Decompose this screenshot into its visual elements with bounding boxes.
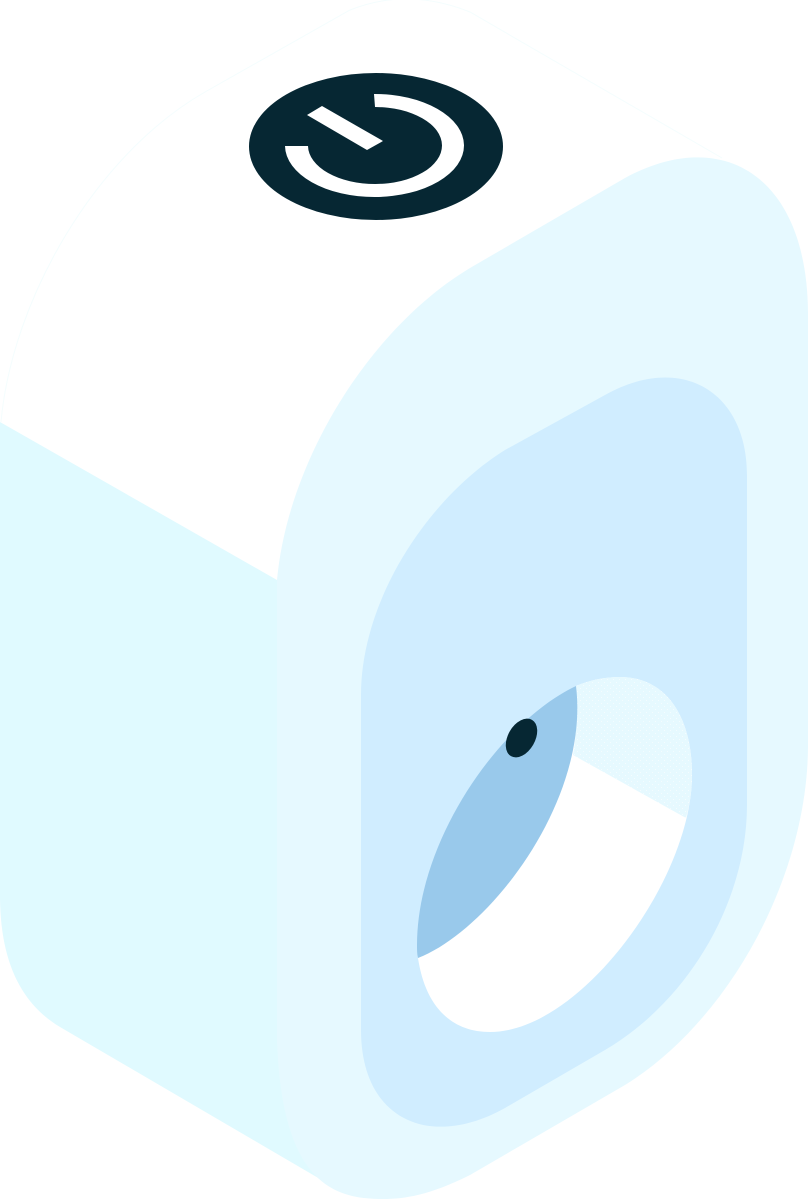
logo: power dial xyxy=(249,73,503,220)
front face xyxy=(277,157,808,1199)
window opening xyxy=(417,677,692,1032)
logo background ellipse xyxy=(249,73,503,220)
logo hand xyxy=(307,106,383,150)
blue inner wall xyxy=(417,686,577,958)
window white interior xyxy=(418,677,692,1032)
window upper light section xyxy=(573,677,692,818)
left side face xyxy=(0,422,320,1179)
dark dot xyxy=(499,713,544,763)
inner panel xyxy=(361,378,747,1127)
top face outline xyxy=(1,0,722,422)
logo ring xyxy=(285,94,464,197)
